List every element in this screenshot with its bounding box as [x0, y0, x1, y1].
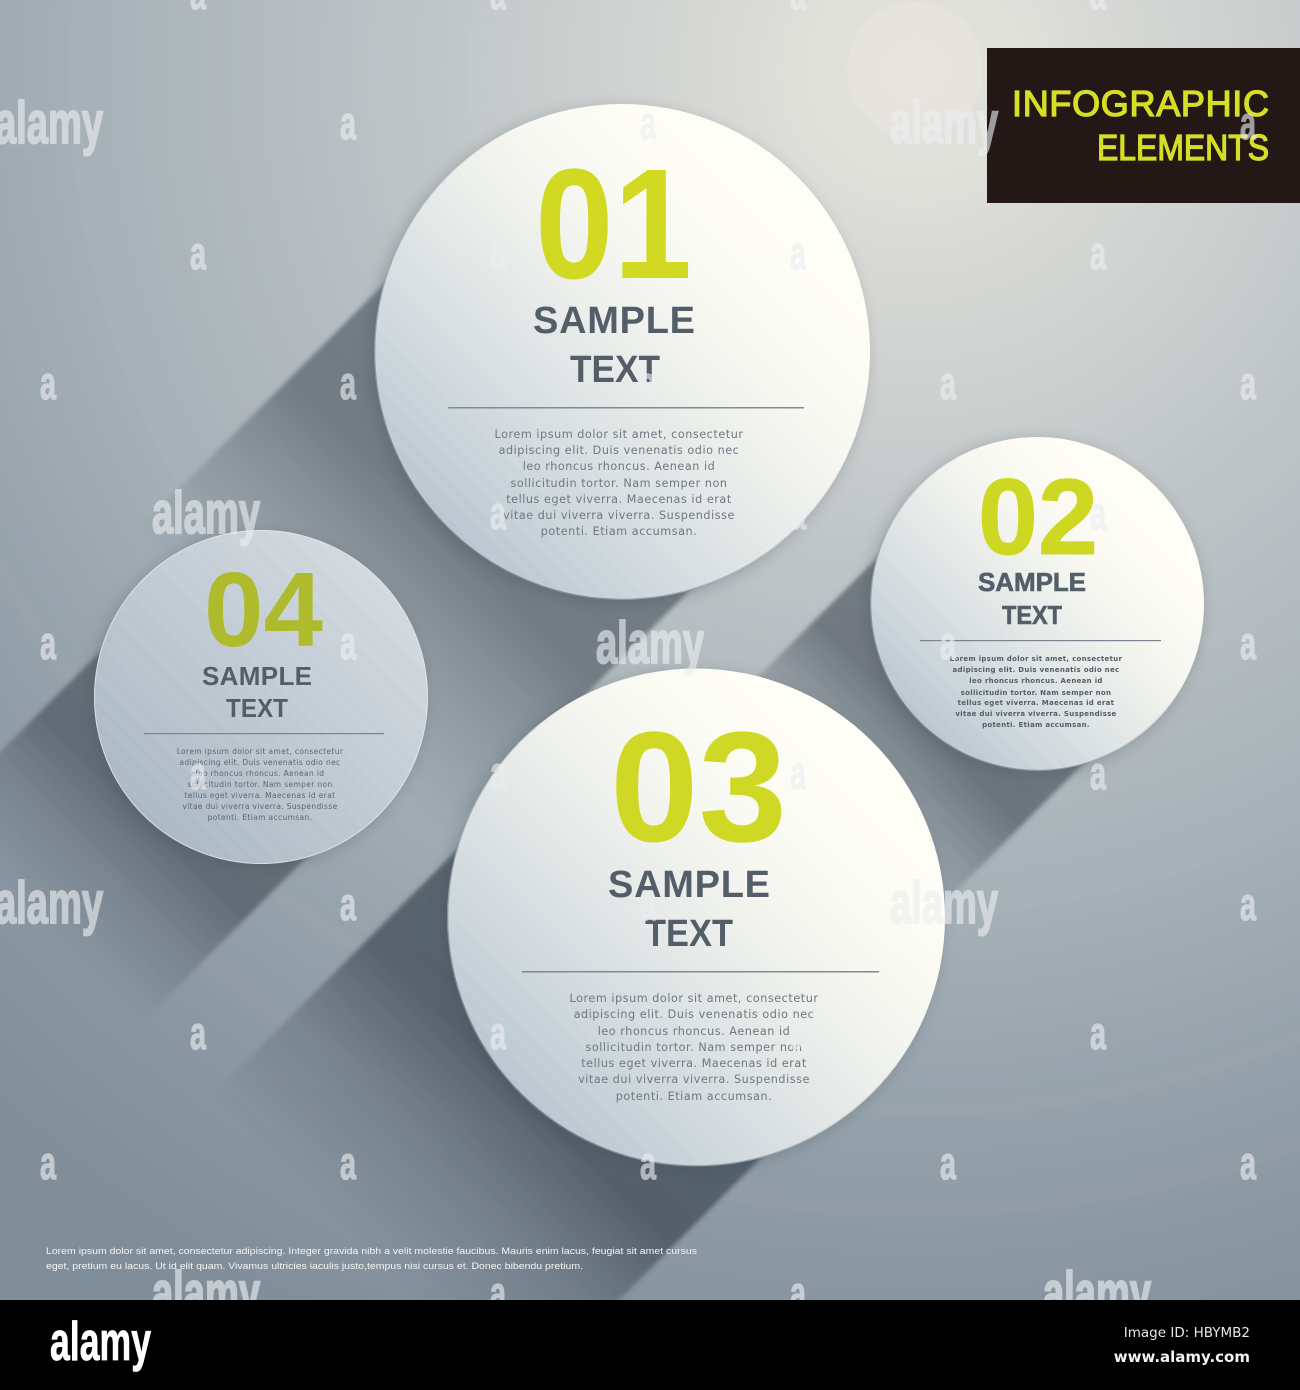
watermarks: a	[790, 487, 806, 539]
watermarks: alamy	[0, 870, 103, 936]
watermarks: a	[340, 1137, 356, 1189]
watermarks: a	[1240, 97, 1256, 149]
watermarks: a	[40, 1137, 56, 1189]
watermarks: a	[790, 227, 806, 279]
brand logo: alamy	[50, 1310, 151, 1372]
body text: Lorem ipsum dolor sit amet, consectetur	[495, 428, 743, 441]
long shadow: circle 03	[243, 847, 765, 1300]
watermarks: a	[490, 227, 506, 279]
website: www.alamy.com	[1114, 1348, 1250, 1366]
body text: adipiscing elit. Duis venenatis odio nec	[179, 758, 341, 767]
heading: sample text: TEXT	[226, 693, 288, 723]
body text: potenti. Etiam accumsan.	[208, 813, 312, 822]
body text: adipiscing elit. Duis venenatis odio nec	[499, 444, 739, 457]
body text: adipiscing elit. Duis venenatis odio nec	[574, 1008, 814, 1021]
footnote text: Lorem ipsum dolor sit amet, consectetur adipiscing. Integer gravida nibh a velit molestie faucibus. Mauris enim lacus, feugiat sit amet cursus	[46, 1246, 697, 1257]
body text: leo rhoncus rhoncus. Aenean id	[969, 677, 1103, 685]
body text: leo rhoncus rhoncus. Aenean id	[598, 1025, 790, 1038]
number 04: 04	[204, 551, 323, 669]
watermarks: a	[1240, 1137, 1256, 1189]
watermarks: a	[640, 1137, 656, 1189]
heading: sample text: SAMPLE	[202, 661, 312, 691]
body text	[570, 992, 818, 1103]
watermarks: a	[190, 1007, 206, 1059]
footer bar	[0, 1300, 1300, 1390]
number 03: 03	[610, 700, 787, 875]
watermarks: a	[640, 357, 656, 409]
watermarks: alamy	[596, 610, 704, 676]
watermarks: a	[490, 1007, 506, 1059]
watermarks: a	[40, 357, 56, 409]
watermarks: a	[1090, 1007, 1106, 1059]
heading: sample text	[978, 567, 1086, 630]
heading: sample text: SAMPLE	[533, 300, 695, 342]
watermarks: a	[340, 878, 356, 930]
body text: vitae dui viverra viverra. Suspendisse	[578, 1073, 810, 1086]
image id: Image ID: HBYMB2	[1124, 1325, 1250, 1341]
heading: sample text	[608, 864, 770, 955]
watermarks: a	[40, 617, 56, 669]
watermarks: a	[1090, 227, 1106, 279]
watermarks: alamy	[152, 480, 260, 546]
body text	[495, 428, 743, 538]
panel: circle 03	[443, 668, 945, 1170]
watermarks: a	[340, 357, 356, 409]
body text: Lorem ipsum dolor sit amet, consectetur	[177, 747, 344, 756]
watermarks: a	[490, 1267, 506, 1319]
body text: leo rhoncus rhoncus. Aenean id	[196, 769, 324, 778]
panel: circle 02	[867, 437, 1204, 774]
watermarks: a	[490, 747, 506, 799]
title box: INFOGRAPHIC	[1012, 83, 1269, 124]
number 02: 02	[978, 456, 1098, 577]
body text: leo rhoncus rhoncus. Aenean id	[523, 460, 715, 473]
divider	[920, 640, 1161, 641]
divider	[144, 733, 384, 734]
body text: Lorem ipsum dolor sit amet, consectetur	[950, 655, 1123, 663]
watermarks: a	[940, 357, 956, 409]
heading: sample text: TEXT	[1002, 600, 1062, 630]
watermarks: a	[940, 617, 956, 669]
watermarks: alamy	[152, 1260, 260, 1326]
long shadow: circle 04	[0, 648, 310, 999]
heading: sample text: SAMPLE	[978, 567, 1086, 597]
body text: potenti. Etiam accumsan.	[541, 525, 697, 538]
watermarks: a	[790, 747, 806, 799]
panel: circle 01	[370, 104, 870, 604]
watermarks: a	[190, 227, 206, 279]
watermarks: a	[1090, 487, 1106, 539]
watermarks: alamy	[890, 870, 998, 936]
heading: sample text	[533, 300, 695, 391]
divider	[448, 407, 804, 408]
body text: tellus eget viverra. Maecenas id erat	[506, 493, 732, 506]
body text: sollicitudin tortor. Nam semper non	[585, 1041, 803, 1054]
watermarks: a	[640, 97, 656, 149]
body text: potenti. Etiam accumsan.	[982, 721, 1090, 729]
panel: circle 04	[91, 530, 428, 867]
long shadow: circle 01	[164, 281, 693, 810]
long shadow: circle 02	[758, 554, 1086, 902]
body text: vitae dui viverra viverra. Suspendisse	[182, 802, 338, 811]
divider	[522, 971, 879, 972]
body text: sollicitudin tortor. Nam semper non	[961, 689, 1111, 697]
title box: ELEMENTS	[1097, 127, 1269, 168]
body text: potenti. Etiam accumsan.	[616, 1090, 772, 1103]
body text: vitae dui viverra viverra. Suspendisse	[503, 509, 735, 522]
watermarks: alamy	[1043, 1260, 1151, 1326]
watermarks: a	[1240, 357, 1256, 409]
watermarks: alamy	[0, 90, 103, 156]
watermarks: a	[940, 1137, 956, 1189]
watermarks: a	[790, 1007, 806, 1059]
heading: sample text	[202, 661, 312, 723]
body text	[177, 747, 344, 822]
body text: vitae dui viverra viverra. Suspendisse	[955, 710, 1117, 718]
watermarks: a	[1240, 617, 1256, 669]
watermarks: a	[340, 97, 356, 149]
watermarks: a	[1090, 747, 1106, 799]
watermarks: a	[340, 617, 356, 669]
body text: tellus eget viverra. Maecenas id erat	[185, 791, 335, 800]
footnote text	[46, 1246, 697, 1272]
watermarks: alamy	[890, 90, 998, 156]
body text	[950, 655, 1123, 729]
body text: sollicitudin tortor. Nam semper non	[510, 477, 728, 490]
watermarks: a	[790, 1267, 806, 1319]
watermarks: a	[1240, 878, 1256, 930]
heading: sample text: TEXT	[570, 349, 660, 391]
footnote text: eget, pretium eu lacus. Ut id elit quam. Vivamus ultricies iaculis justo,tempus nisi cursus et. Donec bibendu pretium.	[46, 1261, 583, 1272]
watermarks: a	[190, 747, 206, 799]
body text: Lorem ipsum dolor sit amet, consectetur	[570, 992, 818, 1005]
heading: sample text: SAMPLE	[608, 864, 770, 906]
body text: tellus eget viverra. Maecenas id erat	[581, 1057, 807, 1070]
body text: sollicitudin tortor. Nam semper non	[187, 780, 333, 789]
title box	[987, 48, 1300, 203]
heading: sample text: TEXT	[645, 913, 733, 955]
watermarks: a	[640, 878, 656, 930]
body text: tellus eget viverra. Maecenas id erat	[958, 699, 1115, 707]
number 01: 01	[535, 137, 692, 312]
body text: adipiscing elit. Duis venenatis odio nec	[953, 666, 1119, 674]
watermarks: a	[490, 487, 506, 539]
